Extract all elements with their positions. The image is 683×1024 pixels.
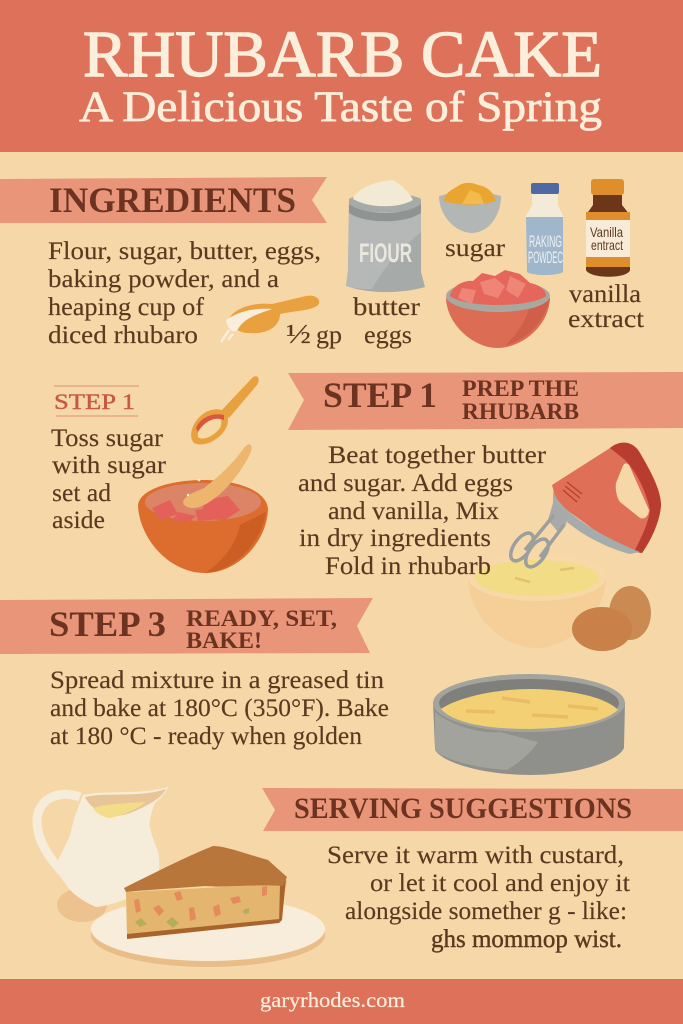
- ingredients text: diced rhubaro: [48, 322, 198, 349]
- header panel: [0, 0, 683, 152]
- icon: measuring scoop: [221, 296, 319, 342]
- step 3 banner: [0, 598, 373, 654]
- ingredients text: baking powder, and a: [48, 266, 279, 293]
- icon: baking powder bottle: RAKING: [529, 232, 562, 251]
- label: butter: butter: [353, 294, 421, 321]
- step 1 banner: RHUBARB: [462, 399, 579, 424]
- serving text: ghs mommop wist.: [431, 926, 622, 953]
- ingredients text: [48, 238, 321, 349]
- step 3 banner: BAKE!: [186, 628, 262, 653]
- subtitle: A Delicious Taste of Spring: [79, 84, 602, 131]
- step 3 text: at 180 °C - ready when golden: [50, 723, 363, 750]
- step 2 text: [298, 442, 547, 580]
- step 2 text: Beat together butter: [328, 442, 547, 469]
- step 2 text: and sugar. Add eggs: [298, 470, 513, 497]
- icon: mixing bowl with batter: [468, 553, 606, 648]
- step 3 text: [50, 667, 389, 750]
- step 1 text: with sugar: [52, 452, 167, 479]
- icon: sugar spoon: [191, 376, 259, 444]
- label: half cup: ½: [286, 319, 311, 349]
- step 1 banner: [288, 372, 683, 430]
- footer panel: [0, 979, 683, 1024]
- icon: vanilla bottle: entract: [591, 237, 623, 253]
- label: vanilla extract: [568, 281, 644, 333]
- icon: eggs: [572, 586, 651, 651]
- icon: cake slice: [124, 846, 287, 939]
- title: RHUBARB CAKE: [83, 18, 602, 91]
- step 1 small heading: [54, 386, 139, 416]
- icon: custard jug: [37, 787, 168, 922]
- step 1 text: set ad: [52, 480, 112, 507]
- icon: flour bag: [346, 180, 425, 292]
- step 3 banner: READY, SET,: [186, 606, 337, 631]
- text: POWDEC: [528, 248, 563, 267]
- serving text: alongside somether g - like:: [345, 898, 627, 925]
- icon: vanilla bottle: [586, 179, 630, 277]
- step 3 text: Spread mixture in a greased tin: [50, 667, 385, 694]
- ingredients banner: INGREDIENTS: [49, 180, 296, 220]
- step 1 small heading: STEP 1: [54, 389, 135, 414]
- footer text: garyrhodes.com: [260, 988, 405, 1012]
- ingredients text: heaping cup of: [48, 294, 205, 321]
- step 2 text: and vanilla, Mix: [328, 498, 500, 525]
- label: half cup: gp: [316, 322, 342, 349]
- icon: vanilla bottle: Vanilla: [590, 224, 623, 240]
- step 1 banner: STEP 1: [323, 375, 437, 415]
- icon: baking powder bottle: [526, 183, 563, 275]
- step 3 text: and bake at 180°C (350°F). Bake: [50, 695, 389, 722]
- step 1 text: [51, 425, 167, 534]
- label: half cup: [286, 319, 342, 349]
- serving suggestions banner: SERVING SUGGESTIONS: [294, 792, 632, 825]
- ingredients text: Flour, sugar, butter, eggs,: [48, 238, 321, 265]
- icon: bowl of rhubarb: [446, 270, 550, 348]
- ingredients banner: [0, 177, 327, 223]
- step 1 text: Toss sugar: [51, 425, 164, 452]
- step 1 banner: PREP THE: [462, 376, 579, 401]
- step 1 text: aside: [52, 507, 105, 534]
- step 2 text: in dry ingredients: [299, 525, 491, 552]
- step 3 banner: STEP 3: [49, 604, 166, 644]
- icon: plate: [91, 897, 325, 967]
- icon: sugar bowl: [439, 183, 501, 233]
- icon: orange bowl with rhubarb: [138, 444, 268, 573]
- label: eggs: eggs: [364, 322, 412, 349]
- flour label: FIOUR: [359, 238, 412, 268]
- icon: hand mixer: [506, 443, 661, 571]
- serving text: Serve it warm with custard,: [327, 842, 624, 869]
- icon: cake tin: [433, 674, 625, 775]
- serving text: [327, 842, 630, 953]
- serving suggestions banner: [262, 788, 683, 831]
- serving text: or let it cool and enjoy it: [370, 870, 630, 897]
- label: sugar: sugar: [445, 235, 506, 262]
- step 2 text: Fold in rhubarb: [325, 553, 491, 580]
- label: vanilla extract: extract: [568, 306, 644, 333]
- label: vanilla extract: vanilla: [569, 281, 641, 308]
